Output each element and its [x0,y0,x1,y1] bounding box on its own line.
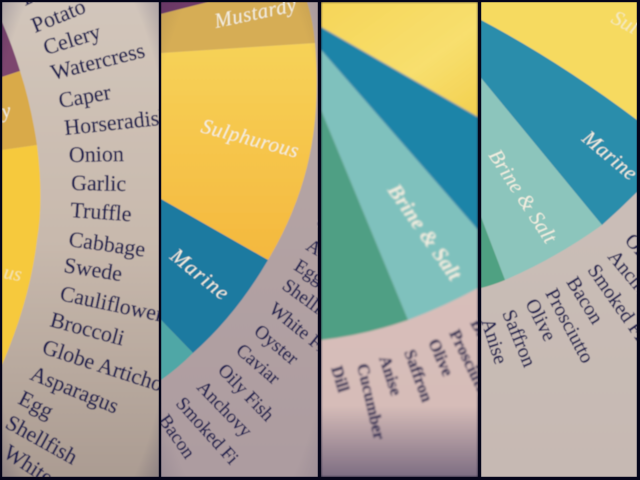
ingredient list, panel 4: Anise [476,316,512,367]
mustard wheel segment [161,2,315,53]
panel 2 vignette [161,2,318,477]
brine and salt wheel segment [321,50,478,320]
yellow wheel segment [2,145,40,365]
ingredient list, panel 2: Anchovy [192,377,256,442]
ingredient list, panel 1: Celery [40,19,104,60]
ingredient list, panel 2 [161,220,318,466]
ingredient list, panel 2: G [313,211,334,236]
brine and salt wheel segment [161,320,193,380]
panel 4 paper background [481,2,637,477]
ingredient list, panel 3: Bacon [467,316,506,365]
ingredient list, panel 2: Caviar [232,340,284,389]
ingredient list, panel 1: Onion [69,141,124,167]
label: Marine: Marine [165,243,234,305]
clipped segment label: Sulphurous: us [2,261,24,286]
ingredient list, panel 3: Cucumber [353,362,389,442]
ingredient list, panel 4: Olive [521,295,560,345]
ingredient list, panel 2: Bacon [154,411,199,463]
ingredient list, panel 1: Cauliflower [58,280,167,327]
ingredient list, panel 2: As [302,235,331,264]
panel 3: blurred brine and salt close-up [321,2,478,477]
marine wheel segment [321,27,478,230]
ingredient list, panel 3 [330,318,478,440]
ingredient list, panel 3: Anise [375,353,406,398]
yellow wheel segment [321,2,478,117]
ingredient list, panel 1 [5,2,159,477]
panel 1 vignette [2,2,159,477]
mustard wheel segment [2,71,37,150]
ingredient list, panel 4: Prosciutto [541,285,598,367]
green wheel segment [321,110,408,340]
marine wheel segment [161,199,268,353]
panel 4: marine and brine segments [476,2,640,477]
ingredient list, panel 3: Dill [327,364,353,395]
label: Brine and Salt: Brine & Salt [484,145,563,248]
ingredient list, panel 1: Shellfish [2,410,82,469]
ingredient list, panel 1: Truffle [70,197,132,226]
ingredient list, panel 1: Horseradish [63,104,171,140]
ingredient list, panel 1: Cabbage [67,226,147,262]
ingredient list, panel 2: Smoked Fi [171,393,242,469]
brine and salt wheel segment [481,78,602,280]
ingredient list, panel 1: Caper [57,79,113,113]
yellow wheel segment [161,43,317,260]
label: Sulphurous: Sulphurous [199,114,302,163]
ingredient list, panel 3: Saffron [400,347,437,405]
ingredient list, panel 1: Garlic [71,170,127,196]
green wheel segment [481,217,505,288]
ingredient list, panel 1: Watercress [48,37,147,85]
marine wheel segment [481,20,637,225]
ingredient list, panel 3: Prosciutto [445,326,495,402]
ingredient list, panel 2: Shellfish [278,275,345,332]
panel 1: vegetable ingredients [2,2,159,477]
ingredient list, panel 1: Asparagus [27,360,123,418]
panel 2: sulphurous and marine segments [161,2,318,477]
ingredient list, panel 4: Saffron [497,307,540,370]
ingredient list, panel 2: Oyster [250,321,303,370]
ingredient list, panel 2: Egg [290,255,328,290]
ingredient list, panel 2: Oily Fish [213,360,278,426]
label: Brine and Salt: Brine & Salt [382,178,467,286]
panel 3 paper background [321,52,478,477]
purple wheel segment [2,22,20,77]
panel 2 paper background [161,2,318,477]
ingredient list, panel 4 [476,230,640,370]
ingredient list, panel 1: Swede [62,252,124,286]
yellow wheel segment [481,2,637,120]
ingredient list, panel 1: Broccoli [48,307,127,350]
purple wheel segment [161,2,208,14]
ingredient list, panel 4: Bacon [562,273,607,328]
ingredient list, panel 1: Egg [15,385,58,424]
ingredient list, panel 1: Globe Artichoke [39,334,186,403]
panel 1 paper background [2,2,159,477]
ingredient list, panel 2: White Fish [265,299,344,368]
ingredient list, panel 3: Olive [424,336,458,379]
